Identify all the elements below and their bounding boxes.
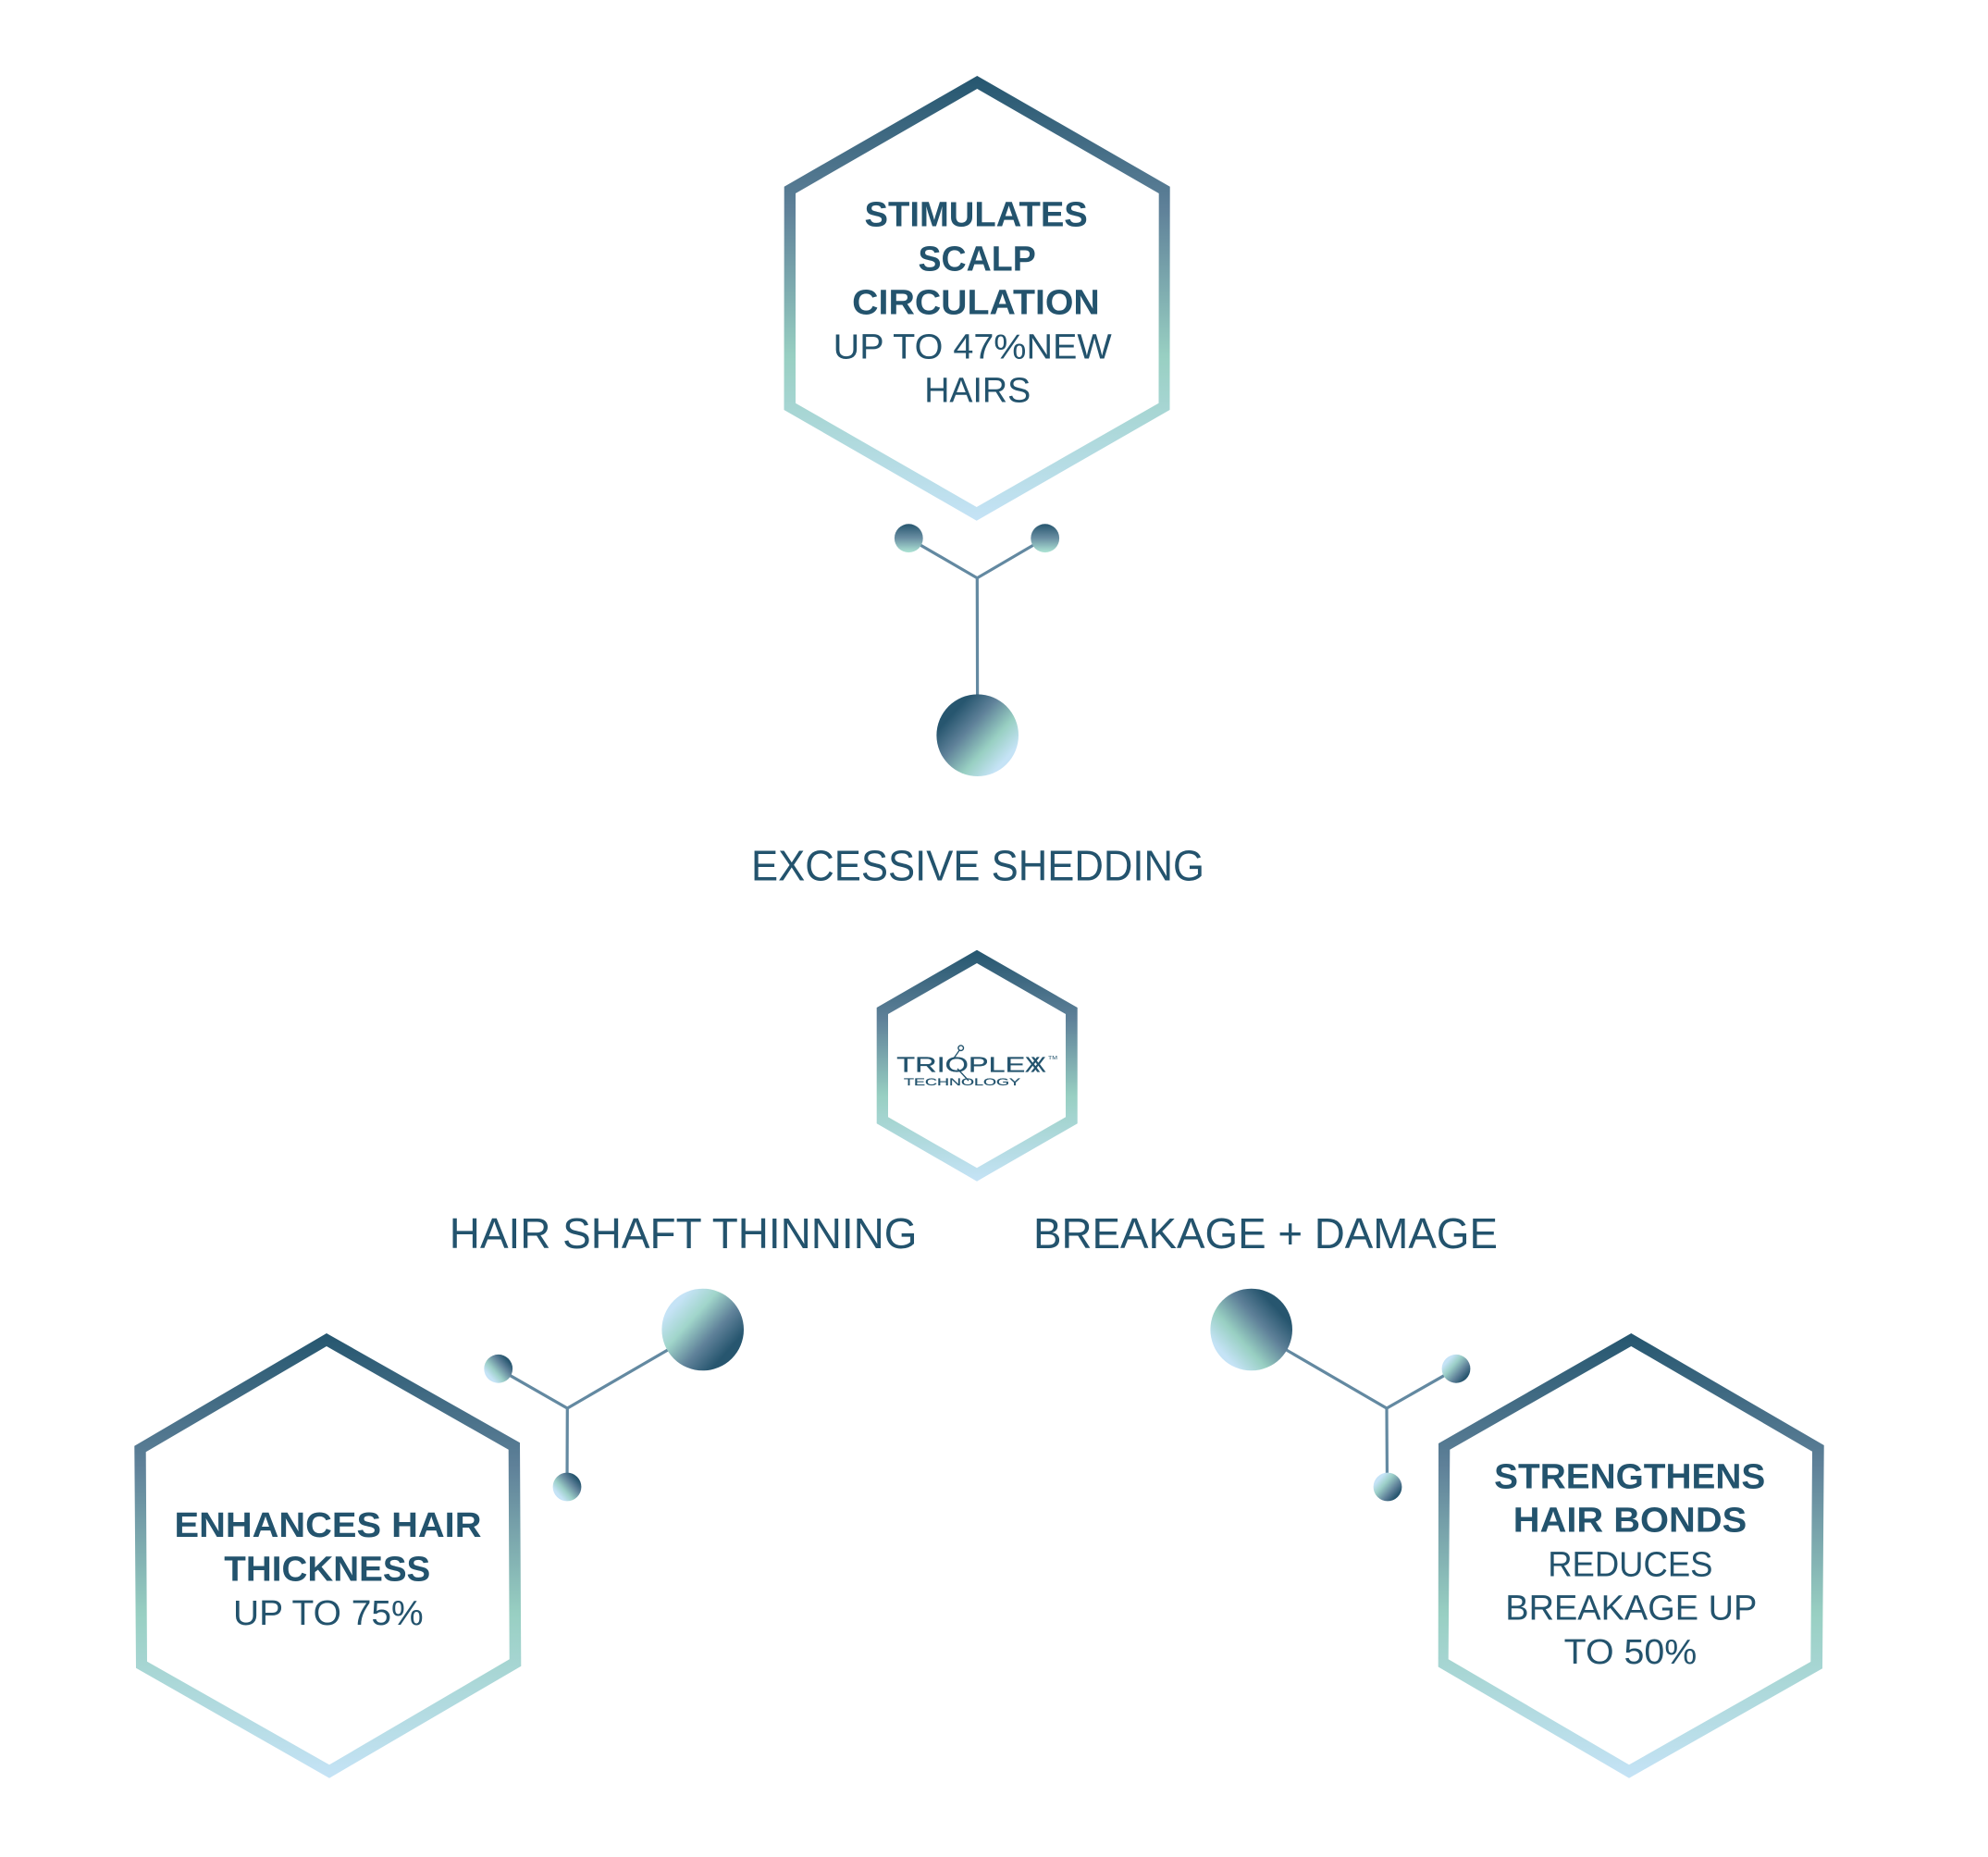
molecule connector: right: [1210, 1289, 1470, 1501]
text: enhances hair thickness: THICKNESS: [224, 1550, 430, 1589]
text: strengthens hair bonds: [1494, 1457, 1765, 1672]
heading: hair shaft thinning: HAIR SHAFT THINNING: [450, 1209, 918, 1257]
logo: trioplex technology: TRIOPLE: [896, 1052, 1025, 1076]
text: stimulates scalp circulation: HAIRS: [924, 372, 1031, 411]
hexagon outline: right: [1439, 1333, 1824, 1778]
logo: trioplex technology: X: [1025, 1052, 1041, 1076]
text: stimulates scalp circulation: CIRCULATION: [852, 284, 1100, 323]
logo: trioplex technology: TECHNOLOGY: [904, 1077, 1021, 1088]
molecule connector: left: [484, 1289, 744, 1501]
text: strengthens hair bonds: STRENGTHENS: [1494, 1457, 1765, 1496]
text: stimulates scalp circulation: STIMULATES: [864, 196, 1088, 235]
hexagon outline: centre: [877, 950, 1078, 1182]
panel: enhances hair thickness: [134, 1333, 521, 1778]
text: strengthens hair bonds: TO 50%: [1564, 1633, 1697, 1672]
text: stimulates scalp circulation: SCALP: [918, 240, 1036, 279]
text: stimulates scalp circulation: UP TO 47%NEW: [833, 328, 1112, 366]
text: enhances hair thickness: UP TO 75%: [233, 1594, 424, 1633]
molecule connector: top: [895, 524, 1059, 776]
hexagon outline: top: [784, 76, 1170, 521]
logo: trioplex technology: [896, 1046, 1058, 1088]
text: enhances hair thickness: ENHANCES HAIR: [174, 1506, 481, 1545]
text: strengthens hair bonds: BREAKAGE UP: [1505, 1590, 1757, 1628]
heading: breakage + damage: BREAKAGE + DAMAGE: [1033, 1209, 1498, 1257]
hexagon outline: left: [134, 1333, 521, 1778]
panel: strengthens hair bonds: [1439, 1333, 1824, 1778]
panel: trioplex technology logo hexagon: [877, 950, 1078, 1182]
logo: trioplex technology: X: [1031, 1052, 1046, 1076]
heading: excessive shedding: EXCESSIVE SHEDDING: [751, 841, 1204, 889]
text: strengthens hair bonds: REDUCES: [1548, 1545, 1713, 1584]
logo: trioplex technology: TM: [1048, 1056, 1058, 1061]
text: enhances hair thickness: [174, 1506, 481, 1633]
text: stimulates scalp circulation: [833, 196, 1112, 411]
text: strengthens hair bonds: HAIR BONDS: [1513, 1502, 1747, 1541]
panel: stimulates scalp circulation: [784, 76, 1170, 521]
